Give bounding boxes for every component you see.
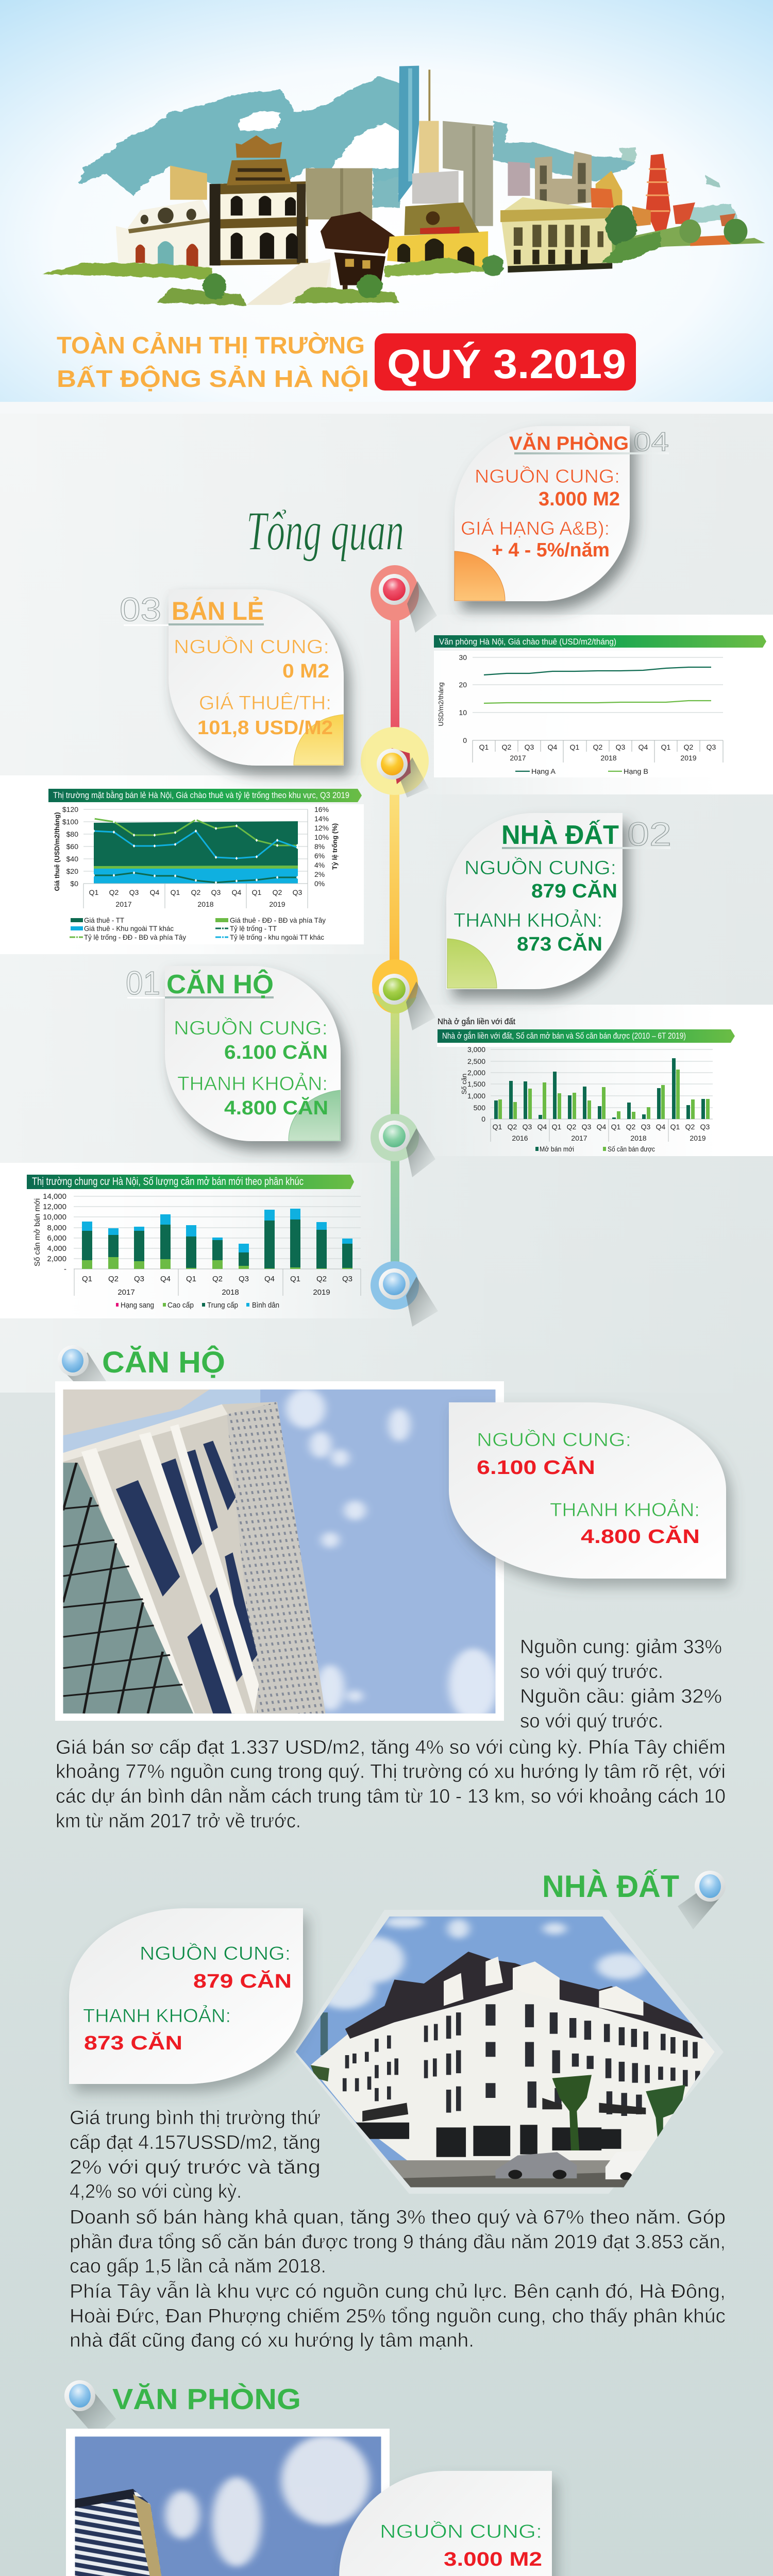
- text block: Nhà đất body: [70, 2207, 726, 2351]
- text block: Nhà đất price: [70, 2107, 321, 2202]
- panel: Bán lẻ 03: GIÁ THUÊ/TH:: [199, 692, 331, 714]
- chart legend: Trung cấp: [207, 1301, 238, 1310]
- timeline node: lime: [372, 959, 435, 1030]
- panel: Bán lẻ 03: 03: [120, 591, 161, 628]
- chart: landed housing: Q2: [567, 1123, 577, 1131]
- chart: office rents: Q1: [479, 743, 489, 751]
- chart: landed housing: Q1: [493, 1123, 502, 1131]
- chart banner: Nhà ở gắn liền với đất, Số căn mở bán và Số căn bán được (2010 – 6T 2019): [442, 1031, 686, 1041]
- chart: retail rents and vacancy: $40: [66, 855, 78, 863]
- chart legend: Bình dân: [252, 1301, 279, 1310]
- chart banner: [48, 789, 362, 802]
- chart: apartment launches: Q1: [290, 1275, 300, 1283]
- photo: apartment tower: [55, 1381, 504, 1721]
- panel: Nhà đất 02: NHÀ ĐẤT: [501, 820, 619, 850]
- chart legend: Tỷ lệ trống - khu ngoài TT khác: [230, 933, 324, 941]
- chart banner: Văn phòng Hà Nội, Giá chào thuê (USD/m2/tháng): [439, 637, 616, 647]
- panel: Căn hộ 01: [126, 964, 341, 1141]
- chart legend: Giá thuê - TT: [84, 916, 124, 924]
- stacked bars: affordable: [82, 1209, 352, 1252]
- chart: office rents: [434, 635, 766, 777]
- chart legend: Mở bán mới: [540, 1145, 574, 1153]
- chart: landed housing: Q4: [597, 1123, 607, 1131]
- chart: retail rents and vacancy: 10%: [314, 833, 329, 841]
- chart: landed housing: Q2: [508, 1123, 517, 1131]
- chart: retail rents and vacancy: Q3: [129, 888, 139, 896]
- chart: retail rents and vacancy: 2%: [314, 870, 325, 878]
- chart: office rents: USD/m2/tháng: [437, 682, 445, 726]
- chart: landed housing: 2016: [512, 1134, 528, 1142]
- chart legend: [116, 1301, 279, 1310]
- text block: Nhà đất body: phần đưa tổng số căn bán được trong 9 tháng đầu năm 2019 đạt 3.853 căn,: [70, 2231, 726, 2253]
- chart legend: Giá thuê - Khu ngoài TT khác: [84, 924, 174, 933]
- chart: apartment launches: 2,000: [47, 1255, 66, 1263]
- chart small heading: Nhà ở gắn liền với đất: [438, 1016, 516, 1026]
- chart legend: Hạng sang: [121, 1301, 154, 1310]
- chart: office rents: 30: [459, 653, 467, 662]
- text block: Nhà đất body: Phía Tây vẫn là khu vực có nguồn cung chủ lực. Bên cạnh đó, Hà Đông,: [70, 2280, 726, 2302]
- chart: retail rents and vacancy: Q1: [171, 888, 180, 896]
- chart: retail rents and vacancy: 2019: [269, 900, 285, 908]
- chart: retail rents and vacancy: Q2: [273, 888, 282, 896]
- panel: Văn phòng stats: NGUỒN CUNG:: [380, 2520, 542, 2542]
- chart legend: Hạng B: [624, 767, 648, 775]
- bars: units sold: [498, 1070, 710, 1119]
- panel: Nhà đất stats: THANH KHOẢN:: [83, 2005, 231, 2026]
- opera house: [500, 197, 612, 268]
- text block: Nhà đất price: cấp đạt 4.157USSD/m2, tăng: [70, 2132, 321, 2154]
- chart: landed housing: 3,000: [467, 1045, 485, 1054]
- chart: landed housing: 2,000: [467, 1069, 485, 1077]
- text block: Căn hộ side note: Nguồn cầu: giảm 32%: [520, 1686, 722, 1707]
- icon: section ball: [58, 1345, 111, 1401]
- panel: Nhà đất stats: 873 CĂN: [84, 2031, 182, 2054]
- stacked bars: mid-range: [82, 1219, 352, 1268]
- section: Căn hộ: [55, 1345, 726, 1832]
- title: [57, 332, 369, 392]
- timeline node: red: [371, 565, 437, 633]
- panel: Văn phòng 04: GIÁ HẠNG A&B):: [461, 518, 610, 539]
- chart banner: Thị trường chung cư Hà Nội, Số lượng căn mở bán mới theo phân khúc: [32, 1176, 304, 1188]
- chart: landed housing: 500: [474, 1104, 485, 1112]
- panel: Văn phòng 04: + 4 - 5%/năm: [492, 539, 610, 561]
- chart: retail rents and vacancy: Q2: [191, 888, 201, 896]
- chart: office rents: 2017: [510, 754, 526, 762]
- chart: retail rents and vacancy: 0%: [314, 879, 325, 888]
- timeline node: green: [371, 1114, 435, 1177]
- chart: apartment launches: Q4: [160, 1275, 171, 1283]
- text block: Căn hộ body: Giá bán sơ cấp đạt 1.337 USD/m2, tăng 4% so với cùng kỳ. Phía Tây chiếm: [56, 1737, 726, 1758]
- chart: office rents: Q4: [638, 743, 648, 751]
- chart: apartment launches: Q1: [186, 1275, 196, 1283]
- panel: Căn hộ 01: 4.800 CĂN: [224, 1096, 328, 1119]
- chart: landed housing: 2018: [630, 1134, 647, 1142]
- text block: Nhà đất body: Doanh số bán hàng khả quan, tăng 3% theo quý và 67% theo năm. Góp: [70, 2207, 726, 2228]
- chart: office rents: 20: [459, 681, 467, 689]
- chart: landed housing: 1,000: [467, 1092, 485, 1100]
- chart: retail rents and vacancy: $100: [62, 818, 78, 826]
- chart: apartment launches: -: [64, 1265, 66, 1274]
- panel: Nhà đất 02: 873 CĂN: [517, 933, 602, 955]
- text block: Căn hộ body: các dự án bình dân nằm cách trung tâm từ 10 - 13 km, so với khoảng cách 10: [56, 1785, 726, 1807]
- heading: NHÀ ĐẤT: [542, 1869, 679, 1904]
- chart: retail rents and vacancy: $60: [66, 842, 78, 851]
- chart strips: [0, 615, 773, 1318]
- chart: landed housing: 2019: [690, 1134, 706, 1142]
- chart: landed housing: 0: [481, 1115, 485, 1123]
- chart: landed housing: Q2: [626, 1123, 636, 1131]
- chart: apartment launches: 8,000: [47, 1224, 66, 1232]
- panel: Nhà đất 02: 02: [627, 816, 671, 853]
- title: BẤT ĐỘNG SẢN HÀ NỘI: [57, 365, 369, 392]
- panel: Căn hộ stats: THANH KHOẢN:: [550, 1499, 700, 1520]
- icon: section ball: [64, 2380, 116, 2437]
- chart: apartment launches: 4,000: [47, 1244, 66, 1253]
- chart: office rents: Q3: [616, 743, 626, 751]
- chart: retail rents and vacancy: 12%: [314, 824, 329, 832]
- chart: apartment launches: Q2: [108, 1275, 119, 1283]
- chart: retail rents and vacancy: Q1: [89, 888, 99, 896]
- text block: Căn hộ body: km từ năm 2017 trở về trước.: [56, 1810, 301, 1832]
- chart: retail rents and vacancy: Q3: [293, 888, 303, 896]
- chart: retail rents and vacancy: 4%: [314, 861, 325, 869]
- chart: landed housing: Q1: [670, 1123, 680, 1131]
- chart: apartment launches: 12,000: [43, 1202, 66, 1211]
- panel: Nhà đất 02: 879 CĂN: [531, 879, 617, 902]
- panel: Văn phòng 04: NGUỒN CUNG:: [475, 465, 620, 487]
- quarter badge: [375, 333, 636, 391]
- panel: Căn hộ 01: CĂN HỘ: [166, 969, 274, 999]
- section: Văn phòng: [64, 2380, 564, 2576]
- section: Nhà đất: [69, 1869, 726, 2351]
- text block: Căn hộ side note: so với quý trước.: [520, 1661, 663, 1683]
- chart: landed housing: Q3: [641, 1123, 651, 1131]
- chart: apartment launches: Q4: [264, 1275, 275, 1283]
- photo: townhouse hexagon: [291, 1910, 724, 2194]
- chart: office rents: Q1: [570, 743, 580, 751]
- bars: new launches: [494, 1058, 705, 1119]
- text block: Căn hộ side note: so với quý trước.: [520, 1710, 663, 1732]
- chart: retail rents and vacancy: $20: [66, 867, 78, 875]
- chart: apartment launches: Q2: [212, 1275, 223, 1283]
- chart banner: [434, 635, 766, 648]
- chart legend: [535, 1145, 655, 1153]
- chart: retail rents and vacancy: $80: [66, 830, 78, 838]
- chart: apartment launches: 6,000: [47, 1234, 66, 1243]
- chart: retail rents and vacancy: Q4: [150, 888, 160, 896]
- panel: Căn hộ stats: [449, 1402, 726, 1579]
- chart: landed housing: Q2: [685, 1123, 695, 1131]
- chart: apartment launches: 2017: [117, 1288, 135, 1297]
- chart: office rents: 2019: [680, 754, 697, 762]
- chart: apartment launches: Số căn mở bán mới: [33, 1198, 42, 1266]
- photo: office towers: [66, 2429, 390, 2576]
- panel: Văn phòng 04: [455, 426, 669, 601]
- chart legend: [70, 916, 326, 941]
- chart: office rents: 2018: [600, 754, 617, 762]
- chart: apartment launches: 14,000: [43, 1192, 66, 1201]
- icon: section ball: [678, 1871, 726, 1929]
- chart legend: Tỷ lệ trống - ĐĐ - BĐ và phía Tây: [84, 933, 186, 941]
- chart: retail rents and vacancy: $0: [70, 879, 78, 888]
- chart: landed housing: Số căn: [460, 1074, 468, 1094]
- panel: Căn hộ 01: 01: [126, 964, 160, 1002]
- text block: Căn hộ side note: Nguồn cung: giảm 33%: [520, 1636, 722, 1658]
- panel: Bán lẻ 03: 101,8 USD/M2: [197, 717, 333, 739]
- chart legend: Giá thuê - ĐĐ - BĐ và phía Tây: [230, 916, 326, 924]
- chart legend: Hạng A: [531, 767, 556, 775]
- chart: office rents: Q2: [593, 743, 603, 751]
- heading: CĂN HỘ: [102, 1346, 225, 1379]
- text block: Nhà đất price: 2% với quý trước và tăng: [70, 2157, 321, 2178]
- panel: Nhà đất 02: [446, 813, 671, 989]
- panel: Căn hộ 01: NGUỒN CUNG:: [174, 1016, 328, 1039]
- timeline: [361, 565, 438, 1327]
- chart: office rents: Q2: [502, 743, 512, 751]
- chart: retail rents and vacancy: 2018: [197, 900, 214, 908]
- panel: Văn phòng 04: 3.000 M2: [539, 488, 620, 510]
- chart: apartment launches: 2019: [313, 1288, 330, 1297]
- chart legend: Cao cấp: [167, 1301, 194, 1310]
- text block: Căn hộ side note: [520, 1636, 722, 1732]
- panel: Nhà đất 02: THANH KHOẢN:: [453, 909, 602, 931]
- panel: Nhà đất stats: [69, 1908, 303, 2084]
- chart legend: Số căn bán được: [608, 1145, 655, 1153]
- chart: retail rents and vacancy: Giá thuê (USD/m2/tháng): [53, 812, 61, 891]
- chart: office rents: 10: [459, 708, 467, 717]
- chart: apartment launches: [27, 1175, 361, 1310]
- chart: retail rents and vacancy: 8%: [314, 842, 325, 851]
- text block: Nhà đất body: cao gấp 1,5 lần cả năm 2018.: [70, 2256, 326, 2277]
- chart: retail rents and vacancy: 2017: [115, 900, 132, 908]
- chart: office rents: Q4: [548, 743, 558, 751]
- chart: apartment launches: 2018: [222, 1288, 239, 1297]
- chart: retail rents and vacancy: 16%: [314, 805, 329, 814]
- title: TOÀN CẢNH THỊ TRƯỜNG: [57, 332, 365, 359]
- chart: landed housing: Q4: [656, 1123, 666, 1131]
- chart banner: Thị trường mặt bằng bán lẻ Hà Nội, Giá chào thuê và tỷ lệ trống theo khu vực, Q3 2019: [53, 790, 349, 800]
- header panel: [0, 0, 773, 414]
- chart: landed housing: Q1: [611, 1123, 621, 1131]
- chart: apartment launches: 10,000: [43, 1213, 66, 1222]
- chart: landed housing: Q3: [523, 1123, 532, 1131]
- chart: office rents: Q2: [684, 743, 694, 751]
- timeline node: yellow: [361, 727, 429, 798]
- panel: Căn hộ stats: 6.100 CĂN: [477, 1456, 595, 1479]
- chart: landed housing: 1,500: [467, 1080, 485, 1088]
- heading: Tổng quan: Tổng quan: [246, 501, 404, 562]
- panel: Nhà đất stats: 879 CĂN: [193, 1970, 292, 1992]
- stacked bars: premium: [82, 1257, 352, 1269]
- text block: Nhà đất price: 4,2% so với cùng kỳ.: [70, 2181, 242, 2202]
- chart: retail rents and vacancy: [46, 789, 364, 944]
- text block: Căn hộ body: khoảng 77% nguồn cung trong quý. Thị trường có xu hướng ly tâm rõ rệt, với: [56, 1761, 726, 1783]
- illustration: Hanoi watercolor skyline: [42, 66, 765, 306]
- chart: landed housing: 2017: [571, 1134, 587, 1142]
- panel: Bán lẻ 03: NGUỒN CUNG:: [174, 635, 329, 658]
- one pillar pagoda: [315, 259, 331, 292]
- left white building: [116, 200, 210, 269]
- chart legend: [515, 767, 648, 775]
- panel: Căn hộ 01: THANH KHOẢN:: [177, 1072, 328, 1095]
- yellow gate: [387, 231, 488, 269]
- panel: Văn phòng 04: 04: [633, 427, 669, 457]
- text block: Nhà đất price: Giá trung bình thị trường thứ: [70, 2107, 321, 2129]
- heading: VĂN PHÒNG: [112, 2383, 301, 2416]
- text block: Căn hộ body: [56, 1737, 726, 1832]
- chart: retail rents and vacancy: Q2: [109, 888, 119, 896]
- panel: Nhà đất 02: NGUỒN CUNG:: [464, 856, 616, 879]
- chart: landed housing: 2,500: [467, 1057, 485, 1065]
- panel: Bán lẻ 03: 0 M2: [282, 660, 329, 682]
- chart: retail rents and vacancy: Q4: [232, 888, 242, 896]
- timeline node: blue: [371, 1261, 438, 1327]
- panel: Bán lẻ 03: BÁN LẺ: [172, 597, 264, 625]
- chart: retail rents and vacancy: 14%: [314, 815, 329, 823]
- chart: retail rents and vacancy: 6%: [314, 852, 325, 860]
- chart: office rents: Q1: [661, 743, 671, 751]
- greenery: [42, 205, 661, 306]
- text block: Nhà đất body: nhà đất cũng đang có xu hướng ly tâm mạnh.: [70, 2330, 474, 2351]
- chart legend: Tỷ lệ trống - TT: [230, 924, 277, 933]
- panel: Bán lẻ 03: [120, 589, 344, 766]
- chart: apartment launches: Q3: [134, 1275, 144, 1283]
- chart: landed housing: Q4: [537, 1123, 547, 1131]
- panel: Căn hộ 01: 6.100 CĂN: [224, 1041, 328, 1063]
- panel: Văn phòng 04: VĂN PHÒNG: [509, 432, 629, 454]
- text block: Nhà đất body: Hoài Đức, Đan Phượng chiếm 25% tổng nguồn cung, cho thấy phân khúc: [70, 2306, 726, 2327]
- chart: apartment launches: Q3: [342, 1275, 352, 1283]
- chart: landed housing: Q3: [700, 1123, 710, 1131]
- chart: apartment launches: Q1: [82, 1275, 92, 1283]
- chart: landed housing: [437, 1016, 735, 1153]
- panel: Căn hộ stats: NGUỒN CUNG:: [477, 1429, 631, 1450]
- chart: retail rents and vacancy: Q3: [211, 888, 221, 896]
- chart: office rents: Q3: [707, 743, 716, 751]
- chart: retail rents and vacancy: Q1: [252, 888, 262, 896]
- chart: office rents: Q3: [525, 743, 534, 751]
- chart: retail rents and vacancy: $120: [62, 805, 78, 814]
- chart: landed housing: Q1: [552, 1123, 562, 1131]
- panel: Nhà đất stats: NGUỒN CUNG:: [140, 1942, 291, 1964]
- Turtle tower: [212, 184, 308, 264]
- chart: apartment launches: Q2: [316, 1275, 327, 1283]
- chart: apartment launches: Q3: [239, 1275, 249, 1283]
- panel: Văn phòng stats: [339, 2471, 552, 2576]
- panel: Căn hộ stats: 4.800 CĂN: [581, 1525, 700, 1548]
- chart: retail rents and vacancy: Tỷ lệ trống (%): [331, 823, 339, 870]
- chart: office rents: 0: [463, 736, 467, 744]
- panel: Văn phòng stats: 3.000 M2: [444, 2549, 542, 2570]
- chart: landed housing: Q3: [582, 1123, 592, 1131]
- quarter badge: QUÝ 3.2019: [387, 341, 626, 387]
